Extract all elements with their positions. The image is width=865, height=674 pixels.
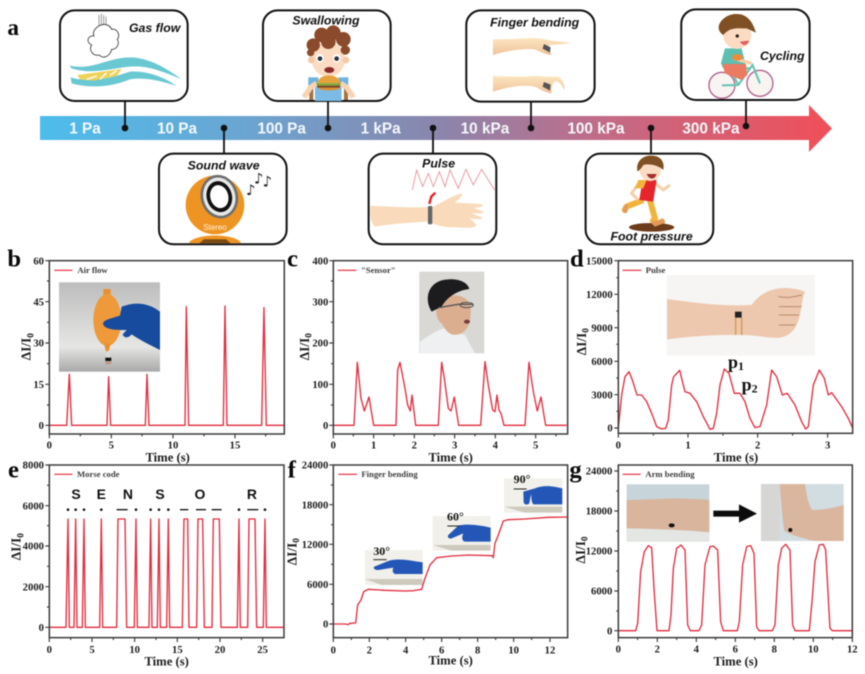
panel letter d: d: [570, 246, 584, 273]
inset photo: finger at 90 degrees: [504, 472, 562, 513]
pressure labels: 300 kPa: [682, 120, 740, 137]
inset photo: bent arm: [761, 484, 844, 541]
callout: finger bending: Finger bending: [490, 16, 580, 30]
morse letters: [71, 486, 257, 502]
axis numbers: 8000: [23, 461, 44, 472]
panel letter a: a: [7, 15, 19, 41]
axis numbers: [586, 467, 858, 655]
inset photo: orange air bulb and gloved hand: [59, 282, 160, 372]
morse letters: S: [71, 486, 81, 502]
axis numbers: 200: [312, 339, 328, 350]
legend: "Sensor": [361, 265, 396, 275]
axis numbers: 30: [33, 339, 44, 350]
callout: swallowing: [263, 10, 391, 101]
axis numbers: [33, 256, 240, 451]
axis numbers: 8: [475, 645, 480, 656]
legend: [623, 265, 666, 275]
icon: music notes: ♪: [254, 170, 263, 187]
axis numbers: 0: [323, 620, 328, 631]
curve: pulse waveform: [618, 369, 853, 429]
axis numbers: 15: [172, 645, 183, 656]
axis numbers: 400: [312, 256, 328, 267]
y axis title: 0: [26, 333, 36, 338]
callout: finger bending: [466, 10, 595, 102]
y axis title: ΔI/I: [284, 543, 299, 565]
axis numbers: 0: [47, 440, 52, 451]
panel b: air flow chart: [7, 246, 284, 465]
axis numbers: 5: [89, 645, 95, 656]
morse letters: R: [247, 486, 257, 502]
axes: [614, 465, 852, 642]
axis numbers: 1: [685, 440, 691, 451]
axis numbers: [23, 461, 268, 656]
pressure labels: 10 kPa: [461, 120, 510, 137]
icon: music notes: ♪: [246, 182, 255, 199]
panel g: arm bending chart: [569, 457, 858, 668]
pressure labels: 100 Pa: [257, 120, 306, 137]
axis numbers: 0: [39, 421, 44, 432]
axis numbers: 20: [215, 645, 225, 656]
axis numbers: 4: [403, 645, 409, 656]
axis numbers: 10: [168, 440, 178, 451]
panel c: speech chart: [287, 246, 568, 465]
axis numbers: 300: [312, 297, 328, 308]
x axis title: Time (s): [428, 653, 473, 667]
axis numbers: 6: [439, 645, 445, 656]
inset photo: finger at 60 degrees: 60°: [447, 510, 464, 524]
y axis title: 0: [305, 333, 315, 338]
inset photo: man speaking: [419, 272, 484, 353]
axes: [45, 261, 284, 438]
pressure labels: 100 kPa: [567, 120, 625, 137]
axis numbers: 0: [616, 440, 621, 451]
axes: [614, 261, 853, 438]
icon: flexible sensor layers: [69, 57, 182, 86]
callout: pulse: Pulse: [422, 157, 455, 171]
axis numbers: 0: [47, 645, 52, 656]
axes: [329, 261, 568, 438]
axis numbers: 3: [452, 440, 457, 451]
morse letters: E: [97, 486, 106, 502]
inset photo: straight arm: [627, 484, 709, 542]
legend: Morse code: [77, 469, 120, 479]
panel letter b: b: [7, 246, 21, 273]
axis numbers: [302, 461, 555, 656]
y axis title: 0: [582, 328, 592, 333]
y axis title: ΔI/I: [573, 541, 588, 564]
x axis title: Time (s): [428, 451, 473, 465]
inset photo: wrist with sensor: [667, 275, 815, 356]
arrow between arm photos: [713, 504, 757, 523]
axis numbers: 2: [655, 644, 660, 655]
inset photo: finger at 30 degrees: [365, 544, 423, 585]
axes: [45, 465, 284, 642]
panel f: finger bending chart: [284, 457, 568, 667]
callout: gas flow: [60, 10, 188, 101]
icon: running boy: [623, 156, 674, 232]
axis numbers: 6000: [307, 580, 328, 591]
axis numbers: 6000: [23, 501, 44, 512]
x axis title: Time (s): [713, 654, 758, 668]
callout: cycling: Cycling: [760, 49, 805, 63]
pressure labels: [69, 120, 740, 137]
callout: sound wave: Sound wave: [188, 158, 260, 172]
icon: bent finger: [493, 76, 564, 93]
curve: sensor speech signal: [333, 362, 567, 425]
x axis title: Time (s): [145, 451, 190, 465]
axis numbers: 25: [257, 645, 268, 656]
icon: straight finger: [493, 38, 570, 55]
x axis title: Time (s): [714, 451, 758, 465]
axis numbers: 2: [367, 645, 372, 656]
pressure scale arrow: [40, 105, 832, 152]
panel letter g: g: [569, 457, 582, 484]
axis numbers: 12000: [586, 290, 613, 301]
pressure labels: 1 kPa: [361, 120, 401, 137]
icon: gas cloud: [88, 14, 119, 57]
axis numbers: 5: [109, 440, 114, 451]
axis numbers: 10: [808, 644, 819, 655]
axis numbers: 0: [331, 645, 336, 656]
axis numbers: 15000: [586, 256, 613, 267]
callout: sound wave: [159, 154, 287, 244]
callout: foot pressure: Foot pressure: [610, 230, 693, 244]
y axis title: 0: [292, 538, 302, 543]
icon: music notes: [246, 170, 272, 199]
axis numbers: [312, 256, 538, 451]
axis numbers: 3000: [591, 390, 613, 401]
axis numbers: 9000: [591, 323, 613, 334]
axis numbers: 24000: [302, 461, 328, 472]
morse letters: O: [195, 486, 206, 502]
callout: gas flow: Gas flow: [129, 21, 182, 35]
axis numbers: 8: [772, 644, 777, 655]
icon: boy on bicycle: [709, 14, 773, 98]
icon: pulse waveform: [412, 169, 495, 190]
annotation p1: 1: [738, 359, 744, 373]
axis numbers: 18000: [302, 500, 328, 511]
icon: arm with wrist sensor: [370, 193, 484, 228]
axis numbers: 45: [33, 297, 44, 308]
annotation p2: 2: [752, 381, 758, 395]
panel a: pressure timeline: [7, 9, 832, 244]
panel letter c: c: [287, 246, 298, 273]
axis numbers: 10: [129, 645, 140, 656]
legend: [54, 469, 120, 479]
legend: [54, 265, 108, 275]
curve: air flow peaks: [49, 306, 284, 425]
legend: Finger bending: [361, 469, 418, 479]
callout: cycling: [681, 9, 810, 100]
annotation p1: p: [728, 352, 738, 372]
axis numbers: 1: [371, 440, 376, 451]
y axis title: ΔI/I: [9, 538, 24, 560]
axis numbers: 10: [508, 645, 519, 656]
icon: orange speaker: Stereo: [203, 223, 227, 232]
axis numbers: 0: [616, 644, 621, 655]
axis numbers: 4: [493, 440, 499, 451]
callout: swallowing: Swallowing: [292, 13, 360, 27]
legend: Pulse: [646, 265, 666, 275]
inset photo: finger at 60 degrees: [433, 510, 491, 551]
panel letter f: f: [288, 457, 297, 484]
morse letters: N: [123, 486, 133, 502]
axis numbers: 4000: [23, 542, 44, 553]
axis numbers: 18000: [586, 507, 612, 518]
curve: morse code pulses: [49, 519, 284, 627]
legend: Arm bending: [645, 469, 695, 479]
x axis title: Time (s): [144, 655, 189, 669]
y axis title: 0: [581, 536, 591, 541]
pressure labels: 1 Pa: [69, 120, 101, 137]
axis numbers: 60: [33, 256, 44, 267]
axis numbers: 6000: [591, 357, 613, 368]
icon: music notes: ♪: [263, 174, 272, 191]
y axis title: ΔI/I: [19, 338, 34, 360]
axes: [329, 465, 568, 642]
axis numbers: 100: [312, 380, 328, 391]
axis numbers: 12000: [302, 540, 328, 551]
morse dots and dashes: [67, 508, 266, 511]
y axis title: 0: [16, 533, 26, 538]
axis numbers: 15: [230, 440, 240, 451]
axis numbers: 0: [607, 424, 613, 435]
axis numbers: 0: [323, 421, 328, 432]
axis numbers: 6: [733, 644, 739, 655]
y axis title: ΔI/I: [297, 338, 312, 360]
axis numbers: 2000: [23, 582, 44, 593]
axis numbers: 3: [825, 440, 830, 451]
legend: [338, 265, 396, 275]
axis numbers: 24000: [586, 467, 612, 478]
panel letter e: e: [8, 457, 19, 484]
axis numbers: 12000: [586, 547, 612, 558]
panel e: morse code chart: [8, 457, 284, 669]
y axis title: ΔI/I: [574, 333, 589, 355]
axis numbers: 2: [755, 440, 760, 451]
connectors and dots: [122, 100, 749, 154]
axis numbers: 0: [39, 623, 44, 634]
legend: [623, 469, 695, 479]
callout: pulse: [369, 154, 496, 244]
axis numbers: 0: [607, 626, 612, 637]
curve: stepped finger bending signal: [333, 517, 568, 625]
pressure labels: 10 Pa: [157, 120, 197, 137]
axis numbers: 0: [331, 440, 336, 451]
annotation p2: p: [742, 374, 752, 394]
axis numbers: 4: [694, 644, 700, 655]
axis numbers: 6000: [591, 587, 612, 598]
inset photo: finger at 90 degrees: 90°: [514, 472, 531, 486]
axis numbers: 5: [533, 440, 538, 451]
icon: boy eating burger: [304, 25, 353, 101]
axis numbers: 12: [847, 644, 858, 655]
curve: arm bending pulses: [618, 544, 852, 631]
morse letters: S: [155, 486, 165, 502]
inset photo: finger at 30 degrees: 30°: [373, 544, 390, 558]
axis numbers: [586, 256, 830, 451]
axis numbers: 15: [33, 380, 44, 391]
panel d: pulse chart: [570, 246, 853, 465]
legend: Air flow: [77, 265, 108, 275]
callout: foot pressure: [586, 154, 713, 244]
axis numbers: 12: [545, 645, 555, 656]
axis numbers: 2: [412, 440, 417, 451]
